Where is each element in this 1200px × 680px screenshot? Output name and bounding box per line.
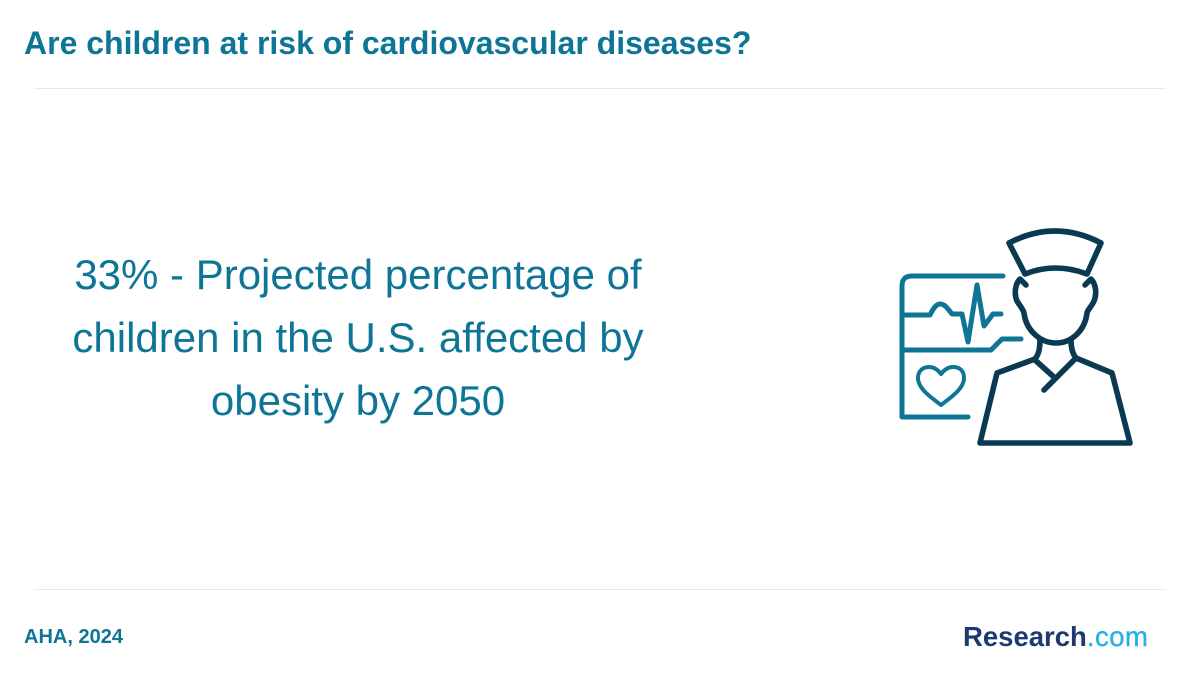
title: Are children at risk of cardiovascular diseases? bbox=[24, 25, 751, 61]
source note: AHA, 2024 bbox=[24, 626, 123, 648]
icon: nurse with heart monitor bbox=[900, 228, 1133, 446]
main statistic text: obesity by 2050 bbox=[211, 377, 505, 424]
logo: Research.com: Research.com bbox=[963, 621, 1148, 652]
icon: nurse bbox=[980, 231, 1130, 443]
main statistic text bbox=[72, 251, 644, 424]
icon: heart monitor bbox=[902, 276, 1021, 417]
main statistic text: children in the U.S. affected by bbox=[72, 314, 644, 361]
main statistic text: 33% - Projected percentage of bbox=[74, 251, 642, 298]
